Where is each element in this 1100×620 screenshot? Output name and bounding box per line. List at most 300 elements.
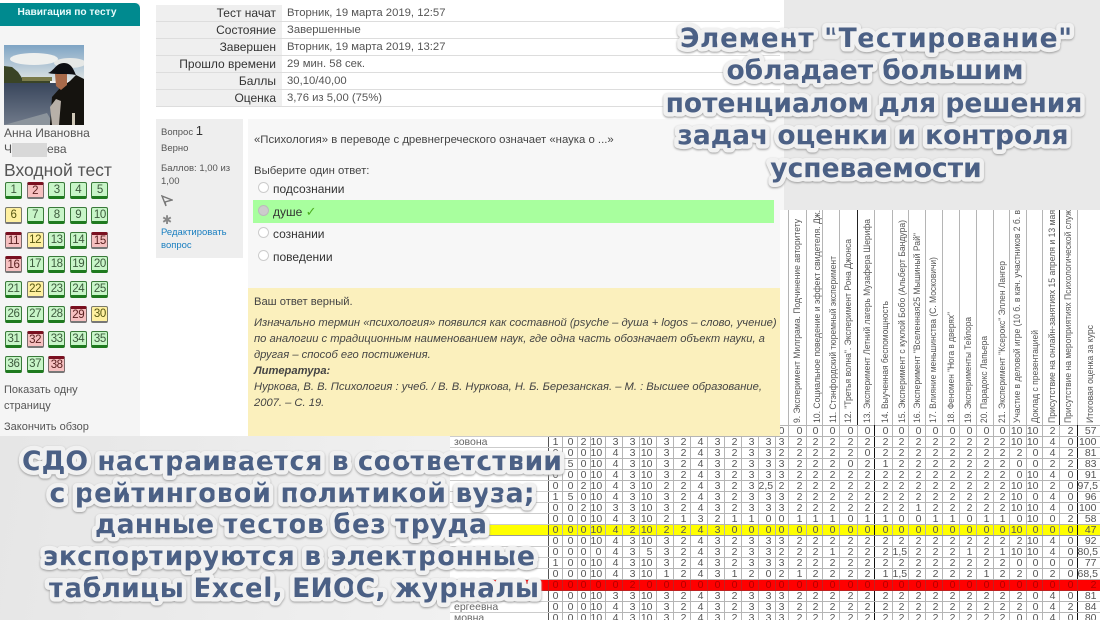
chart: gradebook table: 0	[865, 446, 870, 458]
chart: gradebook table: 0	[568, 556, 574, 568]
chart: gradebook table: 1	[830, 546, 836, 558]
chart: gradebook table: 2	[899, 480, 904, 492]
chart: gradebook table: 2	[1091, 578, 1096, 590]
chart: gradebook table: 2	[732, 446, 738, 458]
panel: attempt summary table: Оценка	[234, 91, 276, 105]
chart: gradebook table: 2	[848, 480, 854, 492]
chart: gradebook table: 2	[1000, 590, 1006, 602]
chart: gradebook table: 3	[630, 568, 636, 580]
chart: gradebook table: 0	[568, 468, 574, 480]
chart: gradebook table: 4	[613, 458, 618, 470]
chart: gradebook table: 2	[830, 436, 836, 448]
edit question link: Редактировать	[161, 227, 227, 238]
question navigation buttons: 13	[51, 234, 63, 246]
chart: gradebook table: 3	[715, 468, 720, 480]
feedback explanation: 2007. – С. 19.	[254, 397, 324, 409]
chart: gradebook table: 0	[1068, 556, 1074, 568]
chart: gradebook table: 0	[568, 600, 574, 612]
question navigation buttons: 32	[29, 334, 41, 346]
question navigation buttons: 14	[72, 234, 84, 246]
chart: gradebook table: 0	[664, 578, 670, 590]
chart: gradebook table: 2	[865, 534, 870, 546]
chart: gradebook table: 2	[813, 546, 818, 558]
chart: gradebook table: 2	[797, 458, 802, 470]
chart: gradebook table: 4	[1050, 534, 1056, 546]
chart: gradebook table: 3	[749, 468, 754, 480]
chart: gradebook table: 2	[984, 446, 990, 458]
chart: gradebook table: 2	[967, 556, 972, 568]
chart: gradebook table: 2	[797, 534, 802, 546]
chart: gradebook table: 2	[1000, 556, 1006, 568]
chart: gradebook table: 5	[568, 490, 574, 502]
chart: gradebook table: 2	[865, 546, 870, 558]
chart: gradebook table: 0	[899, 524, 904, 536]
chart: gradebook table: 2	[681, 556, 686, 568]
chart: rotated gradebook column headers: 18. Феномен "Нога в дверях"	[946, 312, 957, 423]
chart: gradebook table: 1	[732, 568, 738, 580]
chart: gradebook table: 3	[664, 436, 670, 448]
edit question link	[161, 227, 227, 251]
chart: gradebook table: 47	[1085, 524, 1096, 536]
chart: gradebook table: 2	[950, 568, 956, 580]
chart: gradebook table: 3	[630, 556, 636, 568]
chart: gradebook table: 0	[1050, 524, 1056, 536]
chart: gradebook table: 3	[664, 556, 670, 568]
chart: gradebook table: 10	[1027, 546, 1038, 558]
chart: rotated gradebook column headers: 21. Эксперимент "Ксерокс" Эллен Лангер	[997, 261, 1008, 423]
chart: gradebook table: 0	[865, 578, 870, 590]
chart: gradebook table: 2	[933, 568, 938, 580]
sidebar links: Показать одну	[4, 384, 78, 396]
callout: LMS rating policy and export: СДО настраивается в соответствии	[22, 446, 562, 477]
chart: gradebook table: 3	[766, 468, 772, 480]
chart: rotated gradebook column headers: 11. Стэнфордский тюремный эксперимент	[828, 255, 839, 423]
chart: gradebook table: 4	[698, 568, 704, 580]
panel: question content	[248, 119, 784, 288]
chart: gradebook table: 10	[1027, 480, 1038, 492]
chart: gradebook table: 97,5	[1078, 480, 1098, 492]
chart: gradebook table: 2	[779, 480, 784, 492]
chart: gradebook table: 2	[967, 590, 972, 602]
chart: gradebook table: 2	[681, 600, 686, 612]
correct answer highlight	[253, 200, 774, 223]
chart: gradebook table: 3	[715, 502, 720, 514]
chart: rotated gradebook column headers: 20. Парадокс Лапьера	[979, 335, 990, 423]
chart: gradebook table: 1	[916, 502, 922, 514]
chart: gradebook table: 2	[830, 458, 836, 470]
chart: gradebook table: 2	[916, 490, 922, 502]
chart: gradebook table: 0	[1050, 512, 1056, 524]
chart: gradebook table: 2	[813, 600, 818, 612]
chart: gradebook table: 10	[1011, 436, 1022, 448]
chart: gradebook table: 0	[848, 524, 854, 536]
chart: gradebook table: 2	[933, 480, 938, 492]
chart: gradebook table: 10	[641, 490, 652, 502]
chart: gradebook table: 10	[590, 568, 602, 580]
question navigation buttons: 26	[8, 308, 20, 320]
panel: attempt summary table	[156, 5, 780, 107]
chart: gradebook table: 1	[1000, 512, 1006, 524]
question navigation buttons: 16	[8, 259, 20, 271]
chart: gradebook table: 0	[1017, 468, 1022, 480]
chart: gradebook table: 2	[883, 468, 888, 480]
panel: attempt summary table: Прошло времени	[179, 57, 276, 71]
chart: gradebook table: 2	[933, 458, 938, 470]
chart: gradebook table: 0	[899, 512, 904, 524]
chart: gradebook table: 3	[630, 590, 636, 602]
question number: Вопрос 1	[161, 123, 203, 138]
chart: gradebook table: 0	[715, 578, 720, 590]
chart: gradebook table: 0	[916, 578, 922, 590]
chart: gradebook table: 2	[933, 446, 938, 458]
chart: gradebook table: 0	[553, 502, 558, 514]
chart: gradebook table: 2	[984, 502, 990, 514]
chart: gradebook table: 2	[797, 436, 802, 448]
chart: gradebook table: 2	[681, 524, 686, 536]
chart: gradebook table: 0	[1068, 590, 1074, 602]
panel: attempt summary table: Вторник, 19 марта 2019, 13:27	[287, 41, 445, 53]
chart: gradebook table: 4	[613, 468, 618, 480]
chart: gradebook table: 2	[899, 502, 904, 514]
chart: gradebook table: 2	[899, 490, 904, 502]
chart: gradebook table: 77	[1085, 556, 1096, 568]
question navigation buttons: 22	[29, 283, 41, 295]
chart: gradebook table: 10	[641, 600, 652, 612]
chart: gradebook table: 3	[749, 590, 754, 602]
chart: gradebook table: 2	[883, 480, 888, 492]
chart: gradebook table: 2	[933, 590, 938, 602]
question navigation buttons: 29	[72, 309, 84, 321]
chart: gradebook table: 2	[797, 546, 802, 558]
callout: LMS rating policy and export	[18, 446, 566, 610]
chart: gradebook table: 2	[967, 600, 972, 612]
chart: gradebook table: 4	[613, 568, 618, 580]
chart: gradebook table: 2	[1068, 458, 1074, 470]
chart: gradebook table: 0	[1033, 590, 1038, 602]
chart: gradebook table: 2	[830, 502, 836, 514]
chart: gradebook table: 2	[813, 534, 818, 546]
chart: gradebook table: 0	[967, 578, 972, 590]
chart: gradebook table: 10	[1027, 502, 1038, 514]
chart: gradebook table: 0	[1017, 512, 1022, 524]
chart: gradebook table: 0	[883, 524, 888, 536]
chart: gradebook table: 10	[590, 480, 602, 492]
chart: gradebook table: 2	[1017, 534, 1022, 546]
chart: gradebook table: 2	[681, 446, 686, 458]
chart: gradebook table: 0	[1033, 568, 1038, 580]
chart: gradebook table: 0	[848, 512, 854, 524]
chart: gradebook table: 3	[779, 458, 784, 470]
chart: gradebook table: 2	[950, 546, 956, 558]
chart: gradebook table: 3	[779, 590, 784, 602]
chart: gradebook table: 3	[630, 512, 636, 524]
chart: rotated gradebook column headers: 16. Эксперимент "Вселенная25 Мышиный Рай"	[912, 233, 923, 423]
student name: Анна Ивановна	[4, 126, 90, 140]
question text: «Психология» в переводе с древнегреческого означает «наука о ...»	[254, 134, 614, 146]
edit question link: вопрос	[161, 240, 192, 251]
chart: gradebook table: 10	[641, 436, 652, 448]
chart: gradebook table: 10	[590, 512, 602, 524]
chart: gradebook table: 80,5	[1078, 546, 1098, 558]
question navigation buttons: 38	[51, 359, 63, 371]
chart: gradebook table: 5	[568, 458, 574, 470]
question navigation buttons: 19	[72, 258, 84, 270]
chart: gradebook table: 4	[613, 524, 618, 536]
chart: gradebook table: 0	[1068, 490, 1074, 502]
chart: gradebook table: 1	[883, 458, 888, 470]
chart: gradebook table: 0	[865, 524, 870, 536]
question score: Баллов: 1,00 из	[161, 163, 230, 174]
panel: question info	[156, 119, 243, 258]
chart: gradebook table: 1	[950, 512, 956, 524]
chart: gradebook table: 0	[1000, 578, 1006, 590]
chart: gradebook table: 2	[1000, 502, 1006, 514]
chart: gradebook table: 2	[813, 568, 818, 580]
chart: gradebook table: 3	[779, 502, 784, 514]
chart: gradebook table: 3	[630, 502, 636, 514]
chart: gradebook table: 3	[749, 490, 754, 502]
chart: gradebook table: 0	[899, 578, 904, 590]
chart: gradebook table: 2	[732, 600, 738, 612]
chart: gradebook table: 3	[715, 600, 720, 612]
chart: gradebook table: 1	[553, 436, 558, 448]
chart: gradebook table: 0	[553, 458, 558, 470]
chart: gradebook table: 0	[779, 578, 784, 590]
chart: gradebook table: 2	[681, 502, 686, 514]
chart: gradebook table: 2	[967, 446, 972, 458]
chart: gradebook table: 2	[984, 600, 990, 612]
chart: gradebook table: 2	[950, 458, 956, 470]
chart: gradebook table: 2	[933, 502, 938, 514]
chart: gradebook table: 0	[1068, 534, 1074, 546]
chart: gradebook table: 0	[581, 556, 586, 568]
chart: gradebook table: 0	[749, 524, 754, 536]
chart: gradebook table: 0	[883, 578, 888, 590]
chart: gradebook table: 2	[830, 490, 836, 502]
chart: gradebook table: 3	[613, 590, 618, 602]
feedback explanation: по аналогии с традиционным наименованием наук, где одна часть обозначает объект науки, а	[254, 333, 765, 345]
chart: gradebook table: 3	[779, 534, 784, 546]
chart: gradebook table: 3	[664, 600, 670, 612]
chart: gradebook table: 2	[984, 546, 990, 558]
chart: gradebook table: 2	[916, 468, 922, 480]
chart: gradebook table: 2	[830, 590, 836, 602]
chart: gradebook table: 0	[553, 512, 558, 524]
chart: gradebook table: 1	[984, 568, 990, 580]
chart: gradebook table: 2	[797, 468, 802, 480]
chart: gradebook table: 0	[766, 524, 772, 536]
chart: gradebook table: 10	[590, 436, 602, 448]
chart: gradebook table: 2	[848, 534, 854, 546]
question score	[161, 163, 230, 187]
chart: gradebook table: 0	[916, 512, 922, 524]
chart: gradebook table: 2	[732, 436, 738, 448]
chart: gradebook table: 2	[883, 546, 888, 558]
chart: gradebook table: 2	[1017, 446, 1022, 458]
question navigation buttons: 7	[32, 209, 38, 221]
chart: gradebook table: 2	[848, 546, 854, 558]
chart: gradebook table: 2	[984, 556, 990, 568]
chart: gradebook table: 3	[766, 546, 772, 558]
chart: gradebook table: 2	[813, 590, 818, 602]
panel: yellow cover restored over table top	[450, 425, 780, 436]
chart: gradebook table: 3	[749, 458, 754, 470]
callout: LMS rating policy and export: таблицы Excel, ЕИОС, журналы	[49, 573, 539, 604]
chart: rotated gradebook column headers: 17. Влияние меньшинства (С. Московичи)	[928, 257, 939, 423]
chart: gradebook table: 0	[568, 578, 574, 590]
answer prompt: Выберите один ответ:	[254, 165, 369, 177]
chart: gradebook table: 3	[766, 490, 772, 502]
chart: gradebook table: 3	[613, 436, 618, 448]
chart: gradebook table: 10	[590, 590, 602, 602]
question navigation buttons: 35	[94, 333, 106, 345]
chart: gradebook table: 4	[613, 556, 618, 568]
chart: gradebook table: 3	[779, 600, 784, 612]
chart: gradebook table: 10	[641, 446, 652, 458]
chart: gradebook table: 4	[613, 534, 618, 546]
feedback explanation: другая – способ его постижения.	[254, 349, 431, 361]
chart: gradebook table: 0	[779, 524, 784, 536]
chart: gradebook table: 0	[1033, 490, 1038, 502]
chart: gradebook table: 0	[596, 546, 602, 558]
chart: gradebook table: 1	[883, 568, 888, 580]
chart: gradebook table: 0	[581, 590, 586, 602]
chart: gradebook table: 3	[766, 502, 772, 514]
chart: gradebook table: 0	[568, 568, 574, 580]
chart: gradebook table: 3	[779, 556, 784, 568]
chart: gradebook table: 0	[581, 468, 586, 480]
chart: gradebook table: 0	[553, 534, 558, 546]
panel: feedback	[248, 288, 780, 436]
chart: gradebook table: 2	[1000, 436, 1006, 448]
panel: attempt summary table: Вторник, 19 марта 2019, 12:57	[287, 7, 445, 19]
chart: gradebook table: 0	[766, 512, 772, 524]
panel: attempt summary table: 29 мин. 58 сек.	[287, 58, 365, 70]
chart: gradebook table: 4	[698, 556, 704, 568]
chart: gradebook table: 0	[581, 534, 586, 546]
chart: gradebook table: 10	[590, 524, 602, 536]
chart: gradebook table: 2	[1000, 534, 1006, 546]
question navigation buttons: 21	[8, 283, 20, 295]
chart: gradebook table: 2	[950, 590, 956, 602]
chart: gradebook table: 3	[664, 458, 670, 470]
feedback explanation: Нуркова, В. В. Психология : учеб. / В. В. Нуркова, Н. Б. Березанская. – М. : Высшее образование,	[254, 381, 762, 393]
chart: gradebook table: 4	[698, 490, 704, 502]
chart: gradebook table: 2	[899, 468, 904, 480]
chart: gradebook table: 0	[1068, 480, 1074, 492]
callout: LMS rating policy and export: с рейтинговой политикой вуза;	[50, 478, 534, 509]
question navigation buttons: 10	[94, 209, 106, 221]
chart: gradebook table: 2	[899, 600, 904, 612]
chart: gradebook table: 2	[813, 490, 818, 502]
chart: gradebook table: 2	[797, 446, 802, 458]
panel: attempt summary table: Тест начат	[217, 6, 276, 20]
chart: gradebook table: 1	[865, 512, 870, 524]
chart: gradebook table: 2	[848, 568, 854, 580]
chart: gradebook table: 2	[899, 436, 904, 448]
chart: gradebook table: 10	[1027, 534, 1038, 546]
panel: quiz navigation sidebar	[0, 3, 140, 436]
chart: gradebook table: 0	[568, 446, 574, 458]
chart: gradebook table: 3	[749, 446, 754, 458]
chart: gradebook table: 10	[590, 490, 602, 502]
student surname, blurred: Ч ева	[4, 142, 67, 156]
chart: gradebook table: 2	[830, 446, 836, 458]
chart: gradebook table: 1	[984, 512, 990, 524]
chart: gradebook table: 2	[899, 446, 904, 458]
chart: gradebook table: 0	[848, 578, 854, 590]
chart: gradebook table: 3	[749, 546, 754, 558]
chart: gradebook table: 2	[967, 468, 972, 480]
chart: gradebook table: 4	[698, 458, 704, 470]
panel: attempt summary table: Завершен	[220, 40, 276, 54]
chart: gradebook table: 10	[641, 534, 652, 546]
chart: gradebook table: 3	[749, 534, 754, 546]
chart: gradebook table: 0	[581, 490, 586, 502]
question navigation buttons: 28	[51, 308, 63, 320]
chart: gradebook table: 2	[732, 468, 738, 480]
chart: gradebook table: 4	[613, 600, 618, 612]
chart: gradebook table: 0	[568, 534, 574, 546]
chart: gradebook table: 0	[568, 546, 574, 558]
chart: gradebook table: 5	[647, 546, 652, 558]
chart: gradebook table: 2	[1050, 458, 1056, 470]
chart: gradebook table: 2	[681, 458, 686, 470]
chart: gradebook table: 2	[883, 436, 888, 448]
chart: gradebook table: 2	[813, 446, 818, 458]
chart: gradebook table: 0	[581, 524, 586, 536]
chart: gradebook table: 1	[933, 512, 938, 524]
question navigation buttons: 6	[10, 209, 16, 221]
chart: gradebook table: 10	[641, 590, 652, 602]
chart: gradebook table: 2	[732, 590, 738, 602]
chart: gradebook table: 0	[553, 546, 558, 558]
chart: gradebook table: 10	[1027, 436, 1038, 448]
chart: gradebook table: 3	[749, 480, 754, 492]
question score: 1,00	[161, 176, 180, 187]
chart: gradebook table: 2	[950, 502, 956, 514]
chart: gradebook table: 0	[581, 446, 586, 458]
chart: gradebook table: 0	[1068, 468, 1074, 480]
chart: gradebook table: 3	[664, 446, 670, 458]
chart: gradebook table: 3	[664, 590, 670, 602]
chart: gradebook table: 10	[590, 534, 602, 546]
chart: gradebook table: 2	[715, 512, 720, 524]
chart: gradebook table: 2	[1050, 480, 1056, 492]
chart: gradebook table: 1	[813, 512, 818, 524]
chart: gradebook table: 2	[848, 446, 854, 458]
chart: gradebook table: 3	[766, 534, 772, 546]
chart: gradebook table: 2	[813, 556, 818, 568]
feedback explanation: Изначально термин «психология» появился как составной (psyche – душа + logos – слово, учение)	[254, 317, 777, 329]
chart: gradebook table: 0	[647, 578, 652, 590]
chart: gradebook table: 0	[581, 568, 586, 580]
chart: gradebook table: 2	[732, 480, 738, 492]
chart: gradebook table: 3	[749, 556, 754, 568]
chart: gradebook table: 0	[553, 480, 558, 492]
chart: gradebook table: 2	[865, 502, 870, 514]
chart: gradebook table: 2	[984, 534, 990, 546]
chart: gradebook table: 0	[613, 578, 618, 590]
chart: gradebook table: 2	[950, 490, 956, 502]
chart: gradebook table: 4	[613, 446, 618, 458]
sidebar links: страницу	[4, 400, 51, 412]
chart: gradebook table: 2	[883, 590, 888, 602]
chart: gradebook table: 2	[984, 468, 990, 480]
question navigation buttons: 31	[8, 333, 20, 345]
icon: gear: ✱	[162, 213, 172, 227]
chart: gradebook table: 0	[933, 578, 938, 590]
